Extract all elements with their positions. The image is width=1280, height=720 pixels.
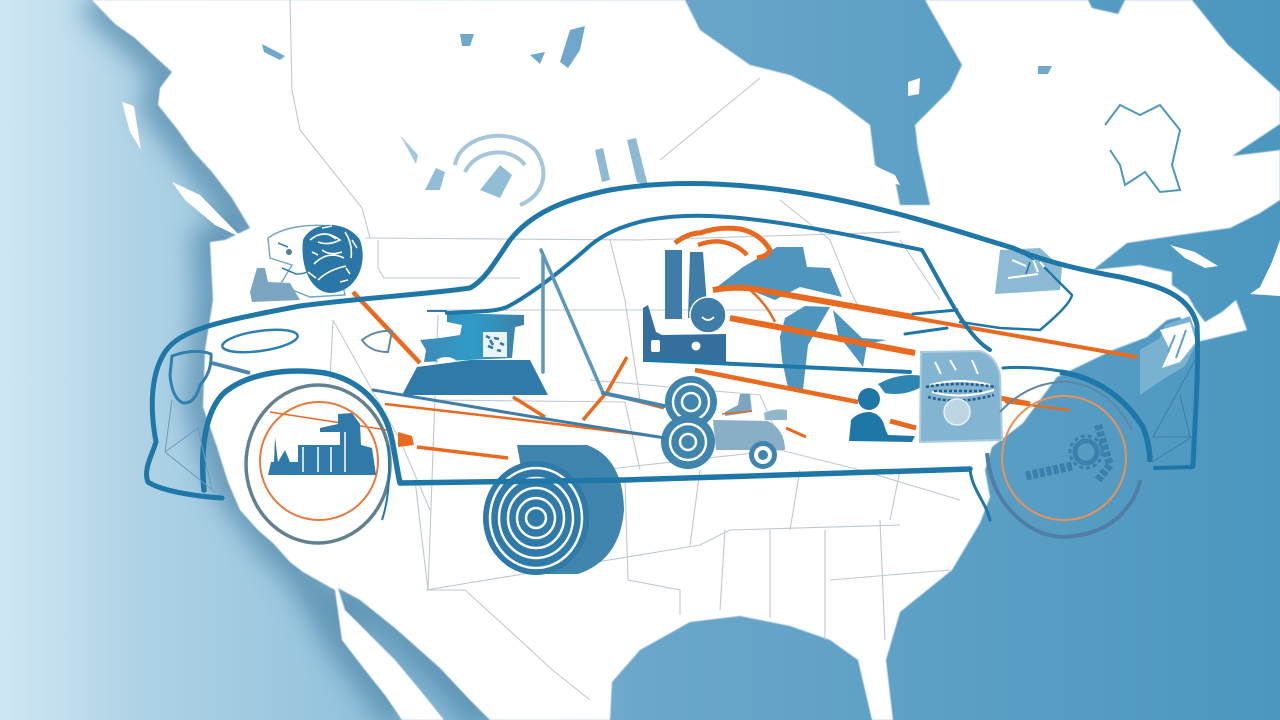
factory skyline in rear wheel [268, 413, 376, 475]
west coast islands [122, 102, 242, 238]
orange connector lines [270, 288, 1137, 458]
great lakes [717, 247, 887, 390]
Newfoundland [1250, 240, 1280, 296]
illustration: windscreen detail block [995, 248, 1062, 294]
state and province borders [290, 0, 960, 700]
large coil drum [483, 445, 624, 575]
coast shadow [92, 0, 490, 720]
illustration: engine block [920, 351, 1002, 442]
orange wedge near rear wheel [398, 432, 414, 447]
front wheel [987, 372, 1150, 539]
lakes and northern water [262, 26, 1052, 198]
rear wheel [246, 385, 390, 543]
small car body [713, 420, 785, 450]
front arch [970, 469, 990, 520]
sill line top [373, 390, 665, 438]
car outline [147, 184, 1198, 520]
Anticosti island [1170, 245, 1218, 268]
northern Quebec outline [1105, 105, 1180, 192]
body top line [147, 184, 1198, 498]
door bits [905, 310, 957, 334]
illustration: iron [402, 311, 548, 395]
rear wheel arch and floor [203, 371, 970, 490]
side window front [960, 268, 1072, 330]
illustration: coils and small car [661, 376, 787, 469]
coil bottom [661, 415, 715, 469]
illustration: person bust with bubble [849, 375, 925, 442]
front bumper wire mesh [1152, 360, 1195, 462]
gears in front wheel [1075, 441, 1097, 463]
Hudson Bay islands [873, 78, 920, 185]
smoke [675, 228, 770, 258]
illustration: person head with tangled brain [250, 225, 363, 302]
inner roof / windscreen [447, 216, 990, 350]
rear tail light and oval [170, 326, 392, 403]
rear bumper corner [1155, 467, 1193, 468]
rear bumper wire mesh [165, 400, 215, 492]
illustration: front bumper detail [1140, 316, 1198, 395]
faded circular ghost outline [455, 136, 543, 205]
window post [541, 250, 603, 393]
coil top [665, 376, 717, 428]
illustration: factory with smoke [643, 228, 770, 362]
